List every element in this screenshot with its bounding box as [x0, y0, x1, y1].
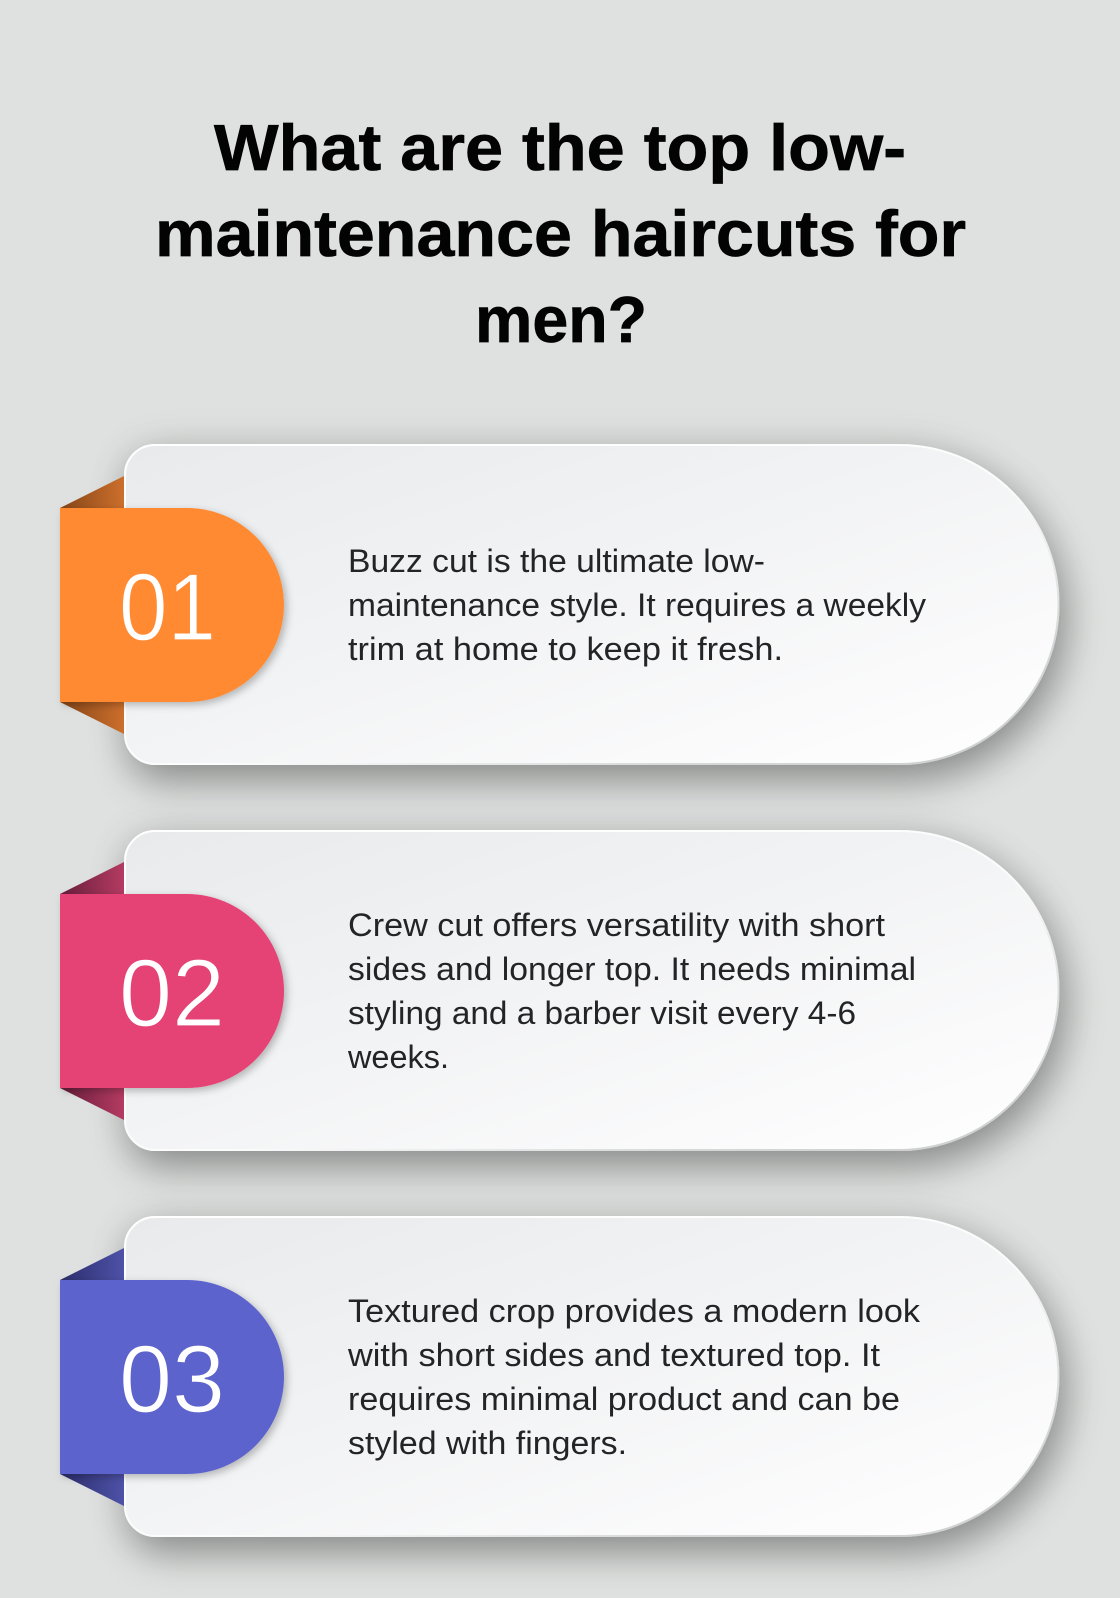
description text: [347, 1293, 921, 1461]
description text: styling and a barber visit every 4-6: [348, 995, 856, 1031]
card background: [125, 1217, 1058, 1536]
title: What are the top low-: [214, 111, 906, 184]
card background: [125, 445, 1058, 764]
title: [155, 111, 966, 356]
card background: [125, 831, 1058, 1150]
ribbon fold top: [60, 476, 124, 508]
description text: styled with fingers.: [348, 1425, 627, 1461]
description text: requires minimal product and can be: [348, 1381, 900, 1417]
description text: weeks.: [347, 1039, 449, 1075]
number 03: 03: [119, 1326, 225, 1433]
ribbon fold bottom: [60, 702, 124, 734]
ribbon fold bottom: [60, 1088, 124, 1120]
description text: [348, 543, 926, 667]
description text: Buzz cut is the ultimate low-: [348, 543, 765, 579]
number tab: [60, 894, 284, 1088]
description text: maintenance style. It requires a weekly: [348, 587, 926, 623]
description text: trim at home to keep it fresh.: [348, 631, 783, 667]
title: men?: [475, 283, 647, 356]
number 01: 01: [119, 554, 216, 661]
description text: with short sides and textured top. It: [347, 1337, 880, 1373]
panel: step 01 buzz cut: [60, 445, 1058, 764]
ribbon fold bottom: [60, 1474, 124, 1506]
number tab: [60, 508, 284, 702]
description text: [347, 907, 916, 1075]
description text: Textured crop provides a modern look: [348, 1293, 921, 1329]
ribbon fold top: [60, 862, 124, 894]
panel: step 02 crew cut: [60, 831, 1058, 1150]
title: maintenance haircuts for: [155, 197, 966, 270]
description text: sides and longer top. It needs minimal: [348, 951, 916, 987]
description text: Crew cut offers versatility with short: [348, 907, 885, 943]
number 02: 02: [119, 940, 225, 1047]
ribbon fold top: [60, 1248, 124, 1280]
panel: step 03 textured crop: [60, 1217, 1058, 1536]
number tab: [60, 1280, 284, 1474]
